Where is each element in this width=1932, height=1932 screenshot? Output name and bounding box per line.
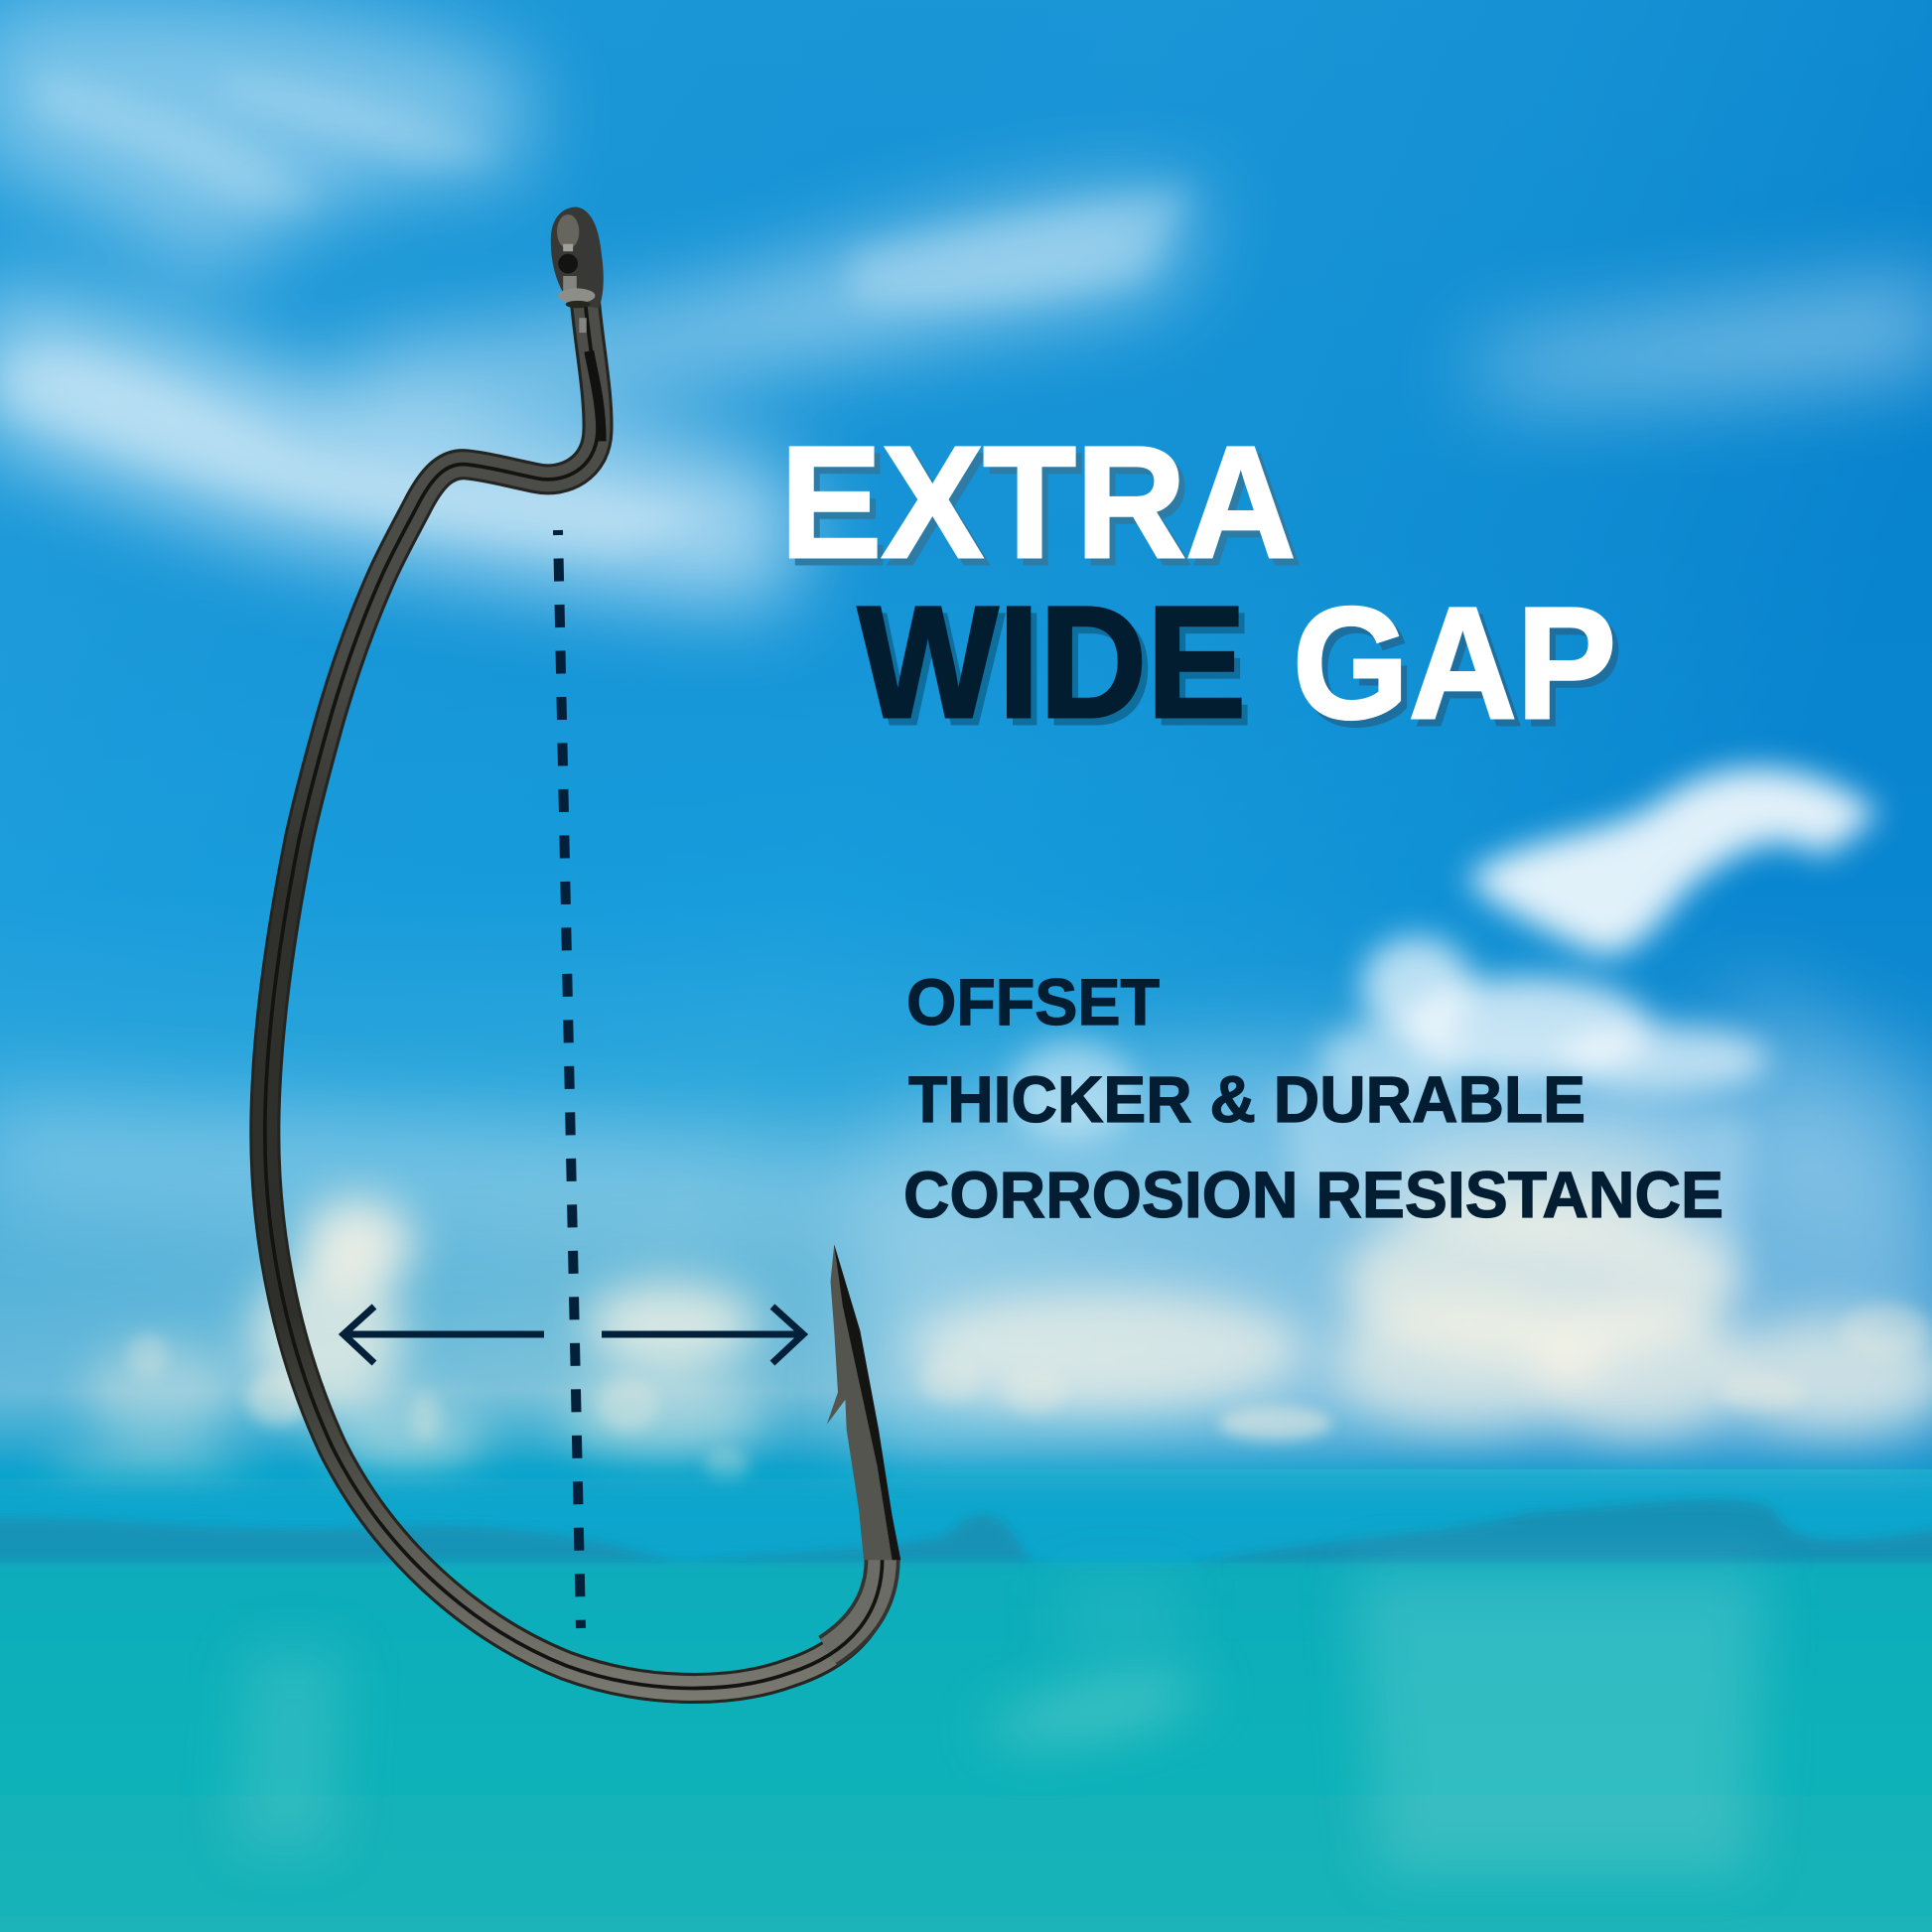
dashed centre line — [558, 530, 581, 1628]
hook eye — [551, 207, 604, 333]
arrow: right — [602, 1307, 803, 1363]
background: sea — [0, 1563, 1932, 1932]
hook body — [265, 302, 883, 1688]
feature: thicker and durable: THICKER & DURABLE — [908, 1062, 1586, 1136]
arrow: left — [344, 1307, 544, 1363]
feature list — [903, 965, 1724, 1231]
hook point and barb — [827, 1245, 900, 1560]
title word: GAP: GAP — [1293, 574, 1616, 752]
title: EXTRA: EXTRA — [780, 413, 1296, 591]
feature: offset: OFFSET — [906, 965, 1160, 1038]
feature: corrosion resistance: CORROSION RESISTANCE — [903, 1158, 1724, 1231]
icon: fishing hook — [265, 207, 900, 1688]
background: clouds — [0, 1, 1932, 1494]
title: WIDE GAP — [858, 573, 1616, 752]
background: horizon band and mountains — [0, 1478, 1932, 1589]
title word: WIDE: WIDE — [858, 573, 1246, 751]
